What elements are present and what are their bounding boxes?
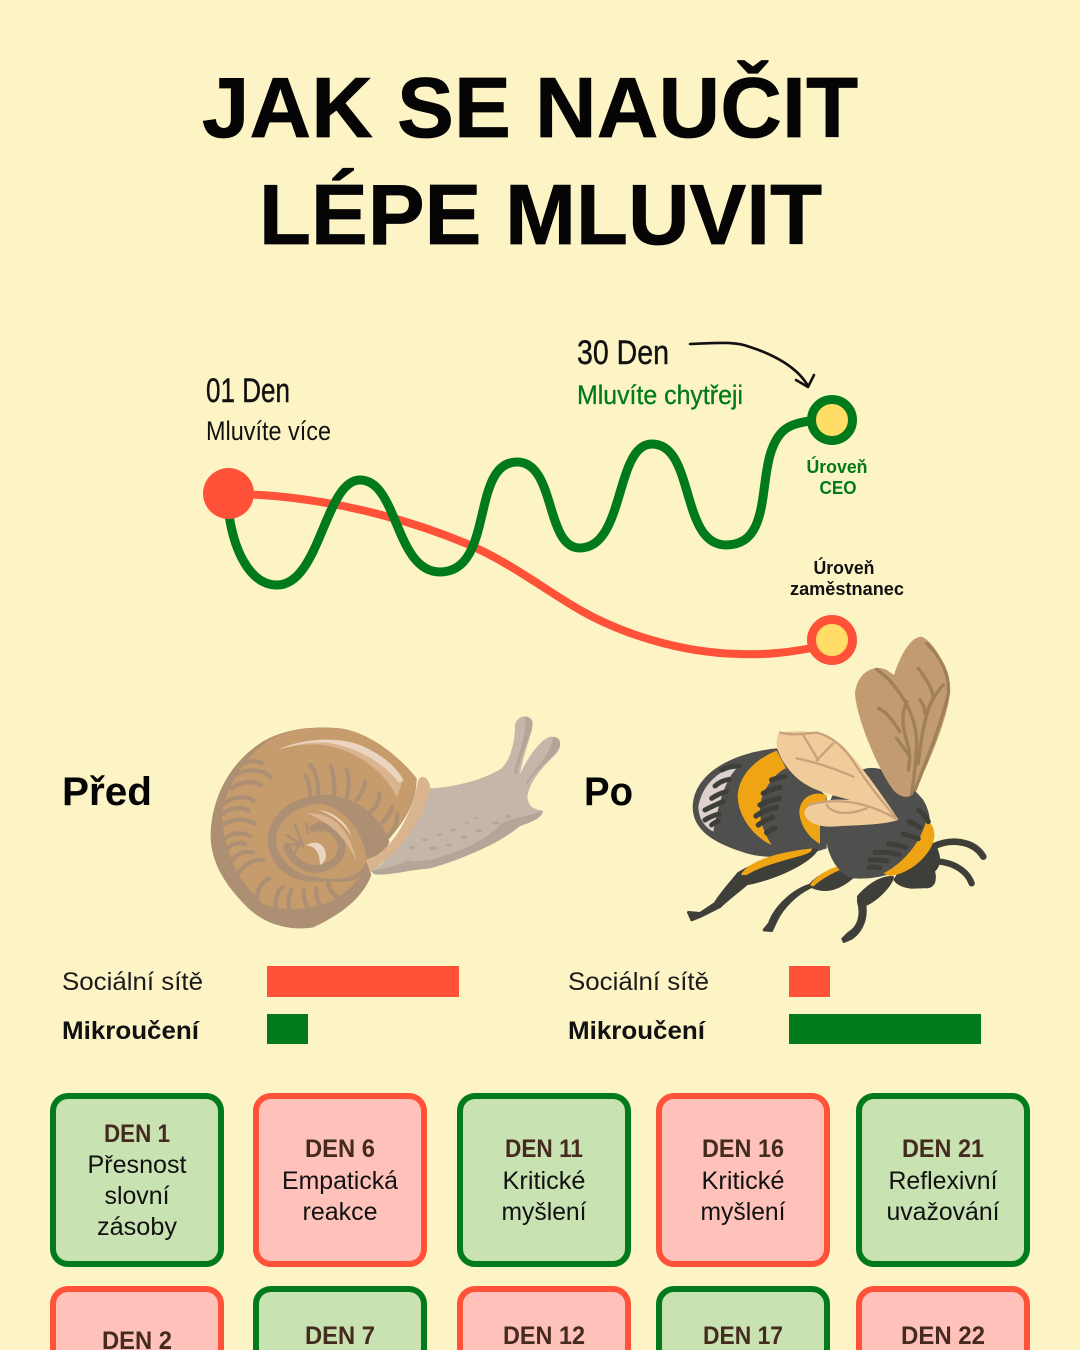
card: day 12 (460, 1289, 628, 1350)
card: day 11 (460, 1096, 628, 1264)
snail body (370, 716, 560, 873)
card: day 6: reakce (302, 1198, 378, 1226)
before comparison bars (62, 966, 459, 1045)
bar: microlearning before (267, 1014, 308, 1044)
bee back wings (855, 637, 950, 797)
card: day 21: Reflexivní (888, 1167, 998, 1195)
chart: progress curves (203, 334, 904, 660)
icon: snail (211, 716, 560, 928)
card: day 2 (53, 1289, 221, 1350)
bar: microlearning after (789, 1014, 981, 1044)
curve: CEO level (229, 421, 810, 585)
card: day 16: myšlení (700, 1198, 786, 1226)
shell spiral (268, 795, 389, 882)
icon: bumblebee (688, 637, 983, 942)
bee head (893, 847, 940, 889)
label: employee level (790, 557, 904, 599)
card: day 7 (256, 1289, 424, 1350)
shell highlight (277, 740, 403, 797)
marker: employee level (812, 620, 852, 660)
title (202, 60, 858, 263)
label: employee level: Úroveň (814, 557, 874, 578)
label: day 30: 30 Den (577, 334, 669, 372)
label: employee level: zaměstnanec (790, 579, 904, 599)
card: day 21: uvažování (886, 1198, 1000, 1226)
label: day 1 (206, 372, 331, 446)
card: day 21 (859, 1096, 1027, 1264)
bee front wings (777, 731, 898, 820)
card: day 21: DEN 21 (902, 1135, 984, 1163)
arrow: to CEO level (690, 343, 814, 387)
shell ribs (223, 761, 397, 910)
card: day 17: DEN 17 (703, 1322, 783, 1350)
card: day 6: DEN 6 (305, 1135, 375, 1163)
card: day 7: DEN 7 (305, 1322, 375, 1350)
card: day 11: DEN 11 (505, 1135, 583, 1163)
card: day 1: zásoby (97, 1213, 177, 1241)
label: CEO level: Úroveň (806, 456, 868, 477)
label: CEO level (806, 456, 868, 498)
title: JAK SE NAUČIT (202, 60, 858, 156)
heading: before: Před (62, 770, 152, 814)
card: day 11: myšlení (502, 1198, 587, 1226)
card: day 1: slovní (104, 1182, 170, 1210)
bee thorax (825, 768, 930, 879)
label: microlearning: Mikroučení (568, 1017, 706, 1045)
marker: CEO level (812, 400, 852, 440)
bar: social networks before (267, 966, 459, 997)
bar: social networks after (789, 966, 830, 997)
card: day 17 (659, 1289, 827, 1350)
title: LÉPE MLUVIT (259, 168, 822, 263)
curve: employee level (228, 494, 812, 654)
marker: start dot (203, 468, 254, 519)
card: day 6: Empatická (282, 1167, 398, 1195)
card: day 22 (859, 1289, 1027, 1350)
label: day 30 (577, 334, 743, 410)
card: day 16 (659, 1096, 827, 1264)
card: day 16: Kritické (702, 1167, 784, 1195)
card: day 11: Kritické (502, 1167, 586, 1195)
label: social networks: Sociální sítě (568, 968, 709, 996)
card: day 12: DEN 12 (503, 1322, 585, 1350)
bee antennae (933, 842, 983, 857)
snail shell (211, 728, 417, 928)
shell lip (366, 777, 430, 872)
card: day 16: DEN 16 (702, 1135, 784, 1163)
after comparison bars (568, 966, 981, 1045)
bee legs (688, 850, 893, 942)
label: microlearning: Mikroučení (62, 1017, 200, 1045)
label: day 1: 01 Den (206, 372, 290, 410)
label: CEO level: CEO (820, 478, 856, 498)
heading: after: Po (584, 770, 633, 814)
card: day 22: DEN 22 (901, 1322, 985, 1350)
card: day 1: DEN 1 (104, 1120, 170, 1148)
bee abdomen (693, 748, 827, 857)
card: day 1: Přesnost (88, 1151, 187, 1179)
card: day 1 (53, 1096, 221, 1264)
label: social networks: Sociální sítě (62, 968, 203, 996)
label: day 1: Mluvíte více (206, 416, 331, 446)
label: day 30: Mluvíte chytřeji (577, 380, 743, 410)
card: day 6 (256, 1096, 424, 1264)
